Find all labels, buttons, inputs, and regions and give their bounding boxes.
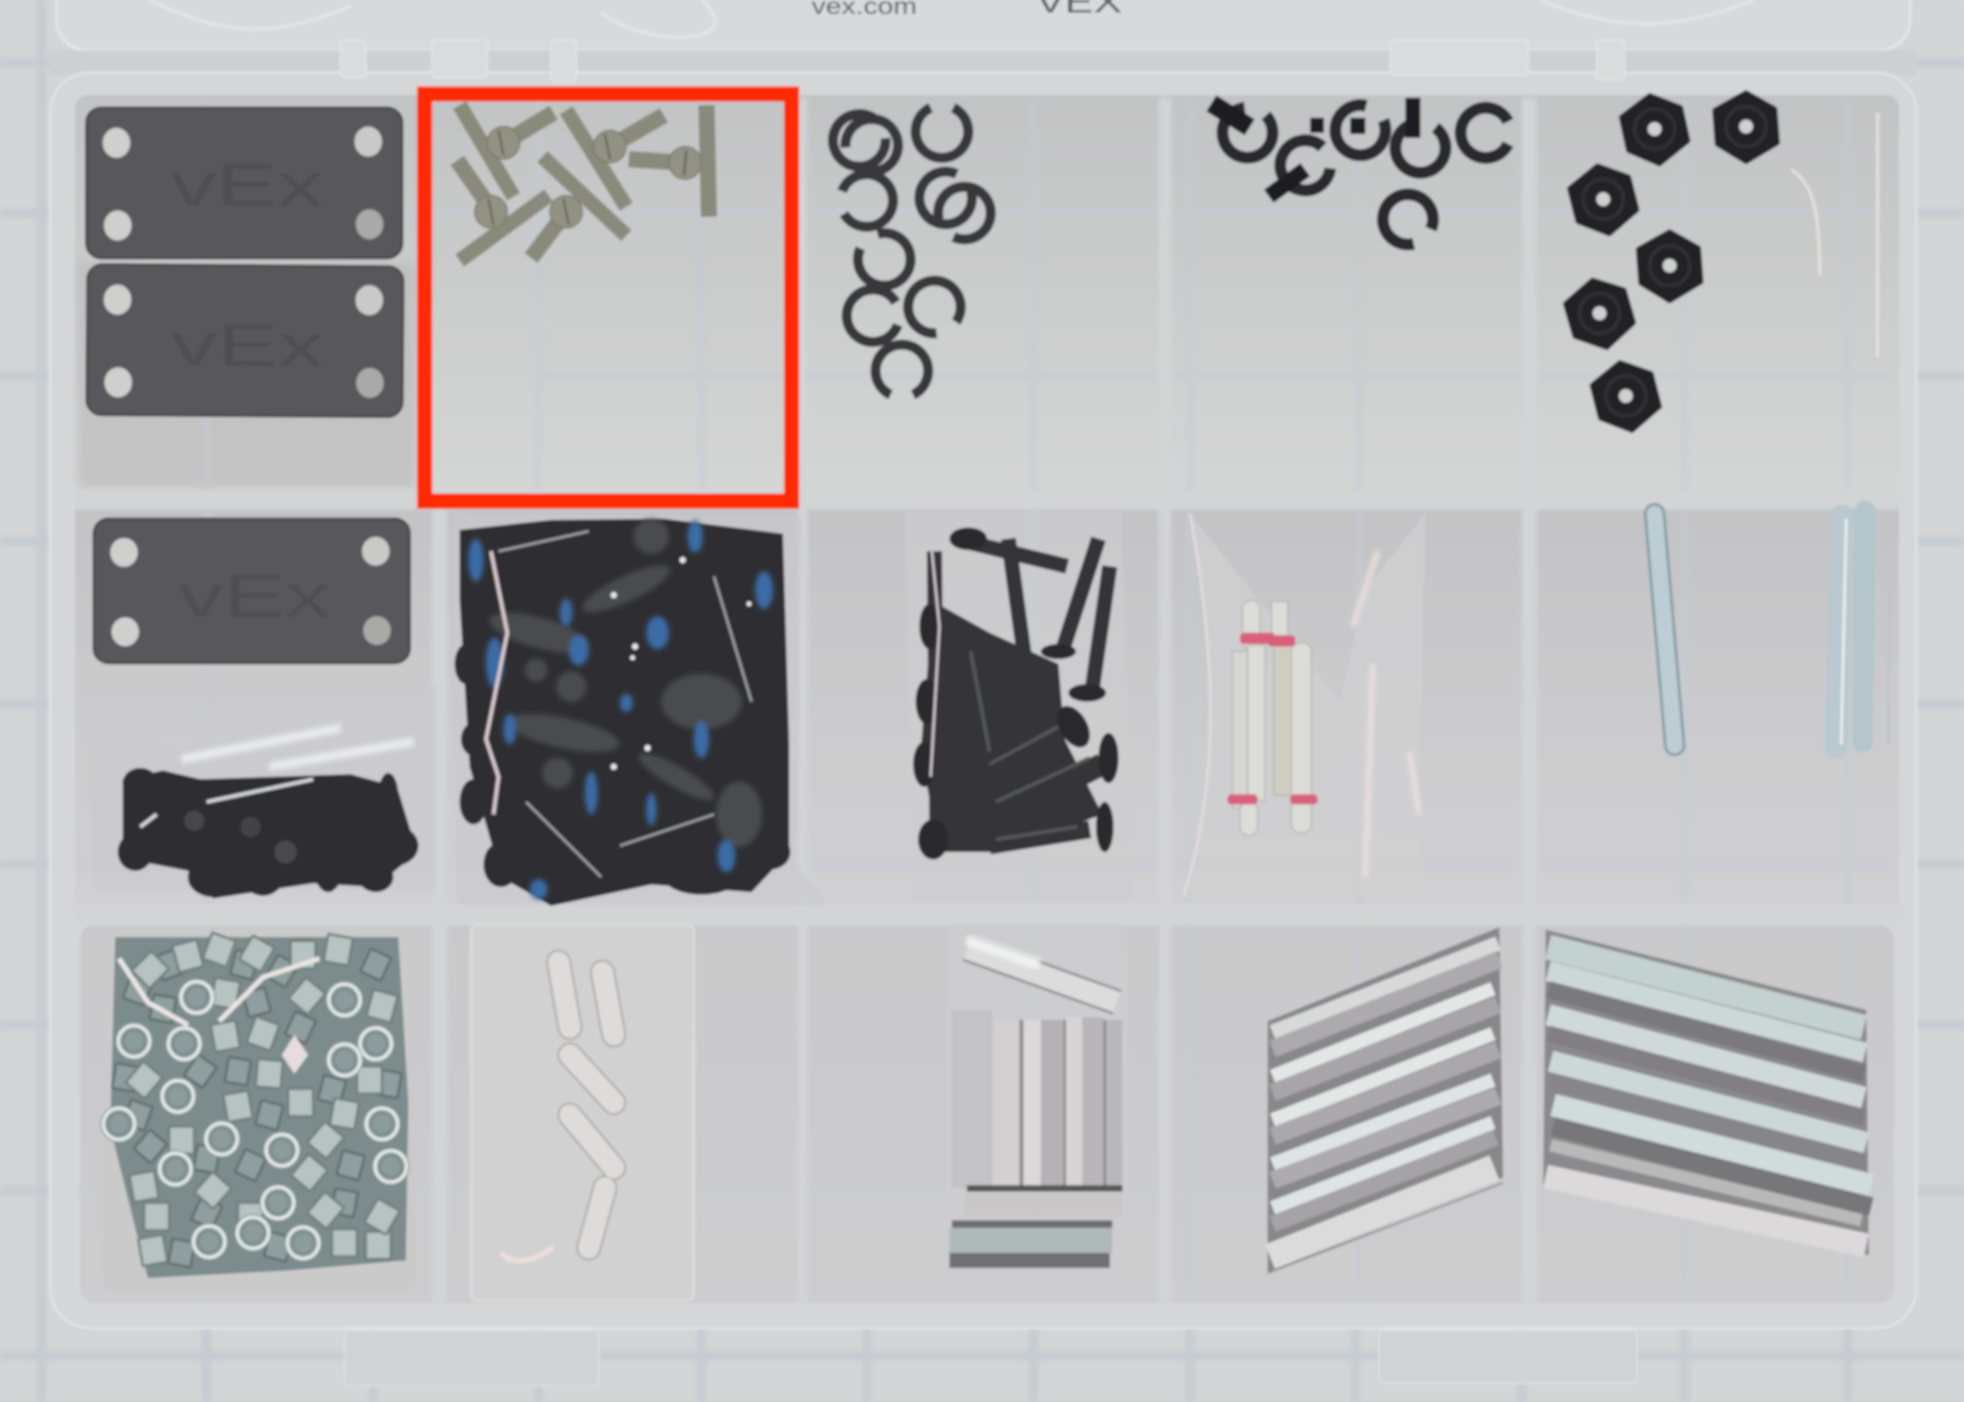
vertical bars <box>952 1010 1122 1192</box>
slotted screws group <box>457 105 709 261</box>
bottom latch tabs <box>344 1331 1637 1386</box>
clips <box>1215 97 1508 253</box>
red bands <box>1228 633 1318 804</box>
bag: medium standoffs <box>947 925 1127 1298</box>
screw mass <box>118 768 418 898</box>
screw 3 <box>629 105 709 217</box>
plate 2: vEx <box>171 311 324 379</box>
plastic bag fold in top right cell <box>1791 113 1878 357</box>
horizontal bars <box>964 1192 1122 1217</box>
e-clips with set screws <box>1206 95 1508 253</box>
lock nuts <box>1562 91 1777 436</box>
bag: long bars rising <box>1268 927 1503 1273</box>
bag: hex nuts <box>100 930 416 1293</box>
e-clips <box>823 106 1001 395</box>
plate 1: vEx <box>170 151 323 218</box>
shaft single <box>1655 514 1675 745</box>
plate 3 <box>94 519 410 663</box>
screw 5 <box>531 157 626 258</box>
filler nuts <box>112 949 402 1267</box>
tray row 1 cells <box>75 95 1899 491</box>
screw mass <box>460 519 789 906</box>
bag: long black screws <box>904 511 1134 902</box>
pins <box>1233 600 1311 836</box>
bag: large black screws with blue threadlock <box>453 514 827 906</box>
lighter thread areas <box>486 519 762 847</box>
plate 3: vEx <box>178 562 331 629</box>
blue threadlock spots <box>468 520 773 900</box>
screw 4 <box>457 160 549 261</box>
lid with printed text <box>56 0 1910 50</box>
bag highlights <box>486 551 507 814</box>
screw mass <box>921 601 1102 852</box>
bag: short standoffs <box>471 925 694 1301</box>
bag: long bars falling <box>1543 930 1871 1255</box>
bag: small black screws <box>88 677 436 898</box>
bright nut <box>282 1035 308 1074</box>
set screws <box>1206 95 1420 203</box>
compartment dividers <box>75 98 1899 1303</box>
grid seen through tray <box>78 100 1891 1298</box>
shafts pair <box>1836 511 1889 747</box>
hinge band <box>50 50 1916 75</box>
screw 2 <box>566 110 664 207</box>
red highlight box <box>425 94 792 501</box>
plate 2 <box>87 264 403 417</box>
tray row 2 cells <box>75 509 1899 905</box>
diagonal bar <box>967 948 1117 1002</box>
bag: pins with red bands <box>1184 514 1425 896</box>
screw 1 <box>460 105 554 197</box>
tray row 3 cells <box>80 925 1894 1303</box>
hinge tabs <box>341 40 1625 83</box>
plate 1 <box>86 108 402 258</box>
